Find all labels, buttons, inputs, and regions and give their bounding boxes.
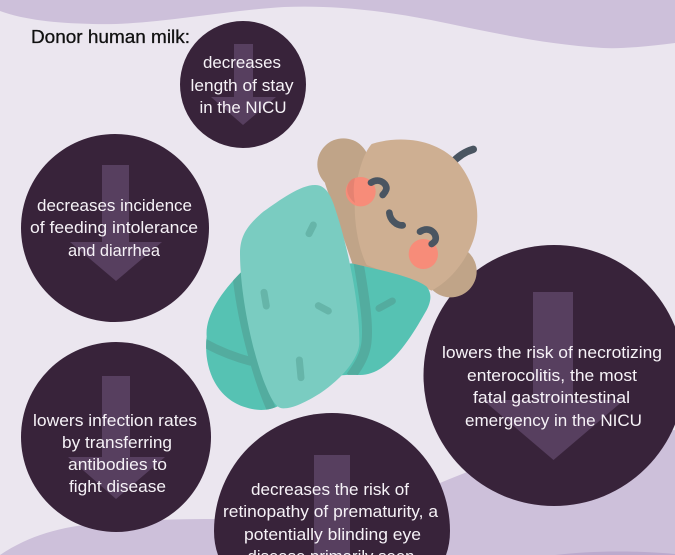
right cheek (409, 239, 438, 269)
right eye (420, 229, 436, 244)
fold: lower (203, 342, 252, 362)
baby right ear (425, 245, 477, 297)
left eye (371, 181, 386, 195)
bubble text: fight disease (69, 478, 166, 496)
bubble text: decreases incidence (37, 197, 192, 215)
swaddle front (240, 185, 359, 408)
bottom right darker wave (555, 551, 675, 555)
bubble text: in the NICU (200, 99, 286, 117)
bubble text: lowers the risk of necrotizing (442, 344, 662, 362)
bubble text: fatal gastrointestinal (473, 389, 630, 407)
bubble text: potentially blinding eye (244, 526, 421, 544)
arrow: down (483, 292, 624, 460)
mouth (389, 213, 403, 225)
bubble: length of stay (180, 21, 306, 148)
bubble text (190, 54, 294, 117)
bubble text (442, 344, 662, 430)
fold: left (237, 270, 272, 410)
title: Donor human milk: (31, 27, 190, 47)
arrow: down (314, 455, 350, 555)
bubble text: lowers infection rates (33, 412, 197, 430)
bottom wave (0, 430, 675, 555)
bubble text: and diarrhea (68, 242, 161, 260)
bubble: infection rates (21, 342, 211, 532)
bubble text: decreases the risk of (251, 481, 409, 499)
bubble text: enterocolitis, the most (467, 367, 637, 385)
bubble text (33, 412, 197, 496)
bubble text (223, 481, 439, 555)
arrow: down (68, 376, 165, 499)
bubble: necrotizing enterocolitis (424, 245, 675, 506)
baby left ear (317, 138, 369, 190)
fold: right (351, 262, 367, 377)
top wave (0, 0, 675, 48)
bubble text: emergency in the NICU (465, 412, 642, 430)
arrow: down (211, 44, 276, 125)
baby hair tuft (452, 149, 473, 163)
bubble text: retinopathy of prematurity, a (223, 503, 439, 521)
bubble text: antibodies to (68, 456, 167, 474)
bubble text: decreases (203, 54, 281, 72)
baby face (355, 140, 477, 291)
swaddle dashes (264, 225, 328, 378)
bubble text: of feeding intolerance (30, 219, 198, 237)
bubble text: length of stay (190, 77, 294, 95)
bubble text: by transferring (62, 434, 172, 452)
arrow: down (70, 165, 162, 281)
bubble text (30, 197, 198, 260)
left cheek (346, 177, 376, 206)
bubble: retinopathy of prematurity (214, 413, 450, 555)
baby head shadow (325, 153, 433, 290)
icon: swaddled baby (203, 138, 477, 410)
swaddle back (206, 263, 430, 410)
swaddle back dash (379, 301, 392, 308)
bubble: feeding intolerance (21, 134, 209, 322)
swaddle folds (203, 262, 367, 410)
left cheek shadow (347, 178, 355, 203)
